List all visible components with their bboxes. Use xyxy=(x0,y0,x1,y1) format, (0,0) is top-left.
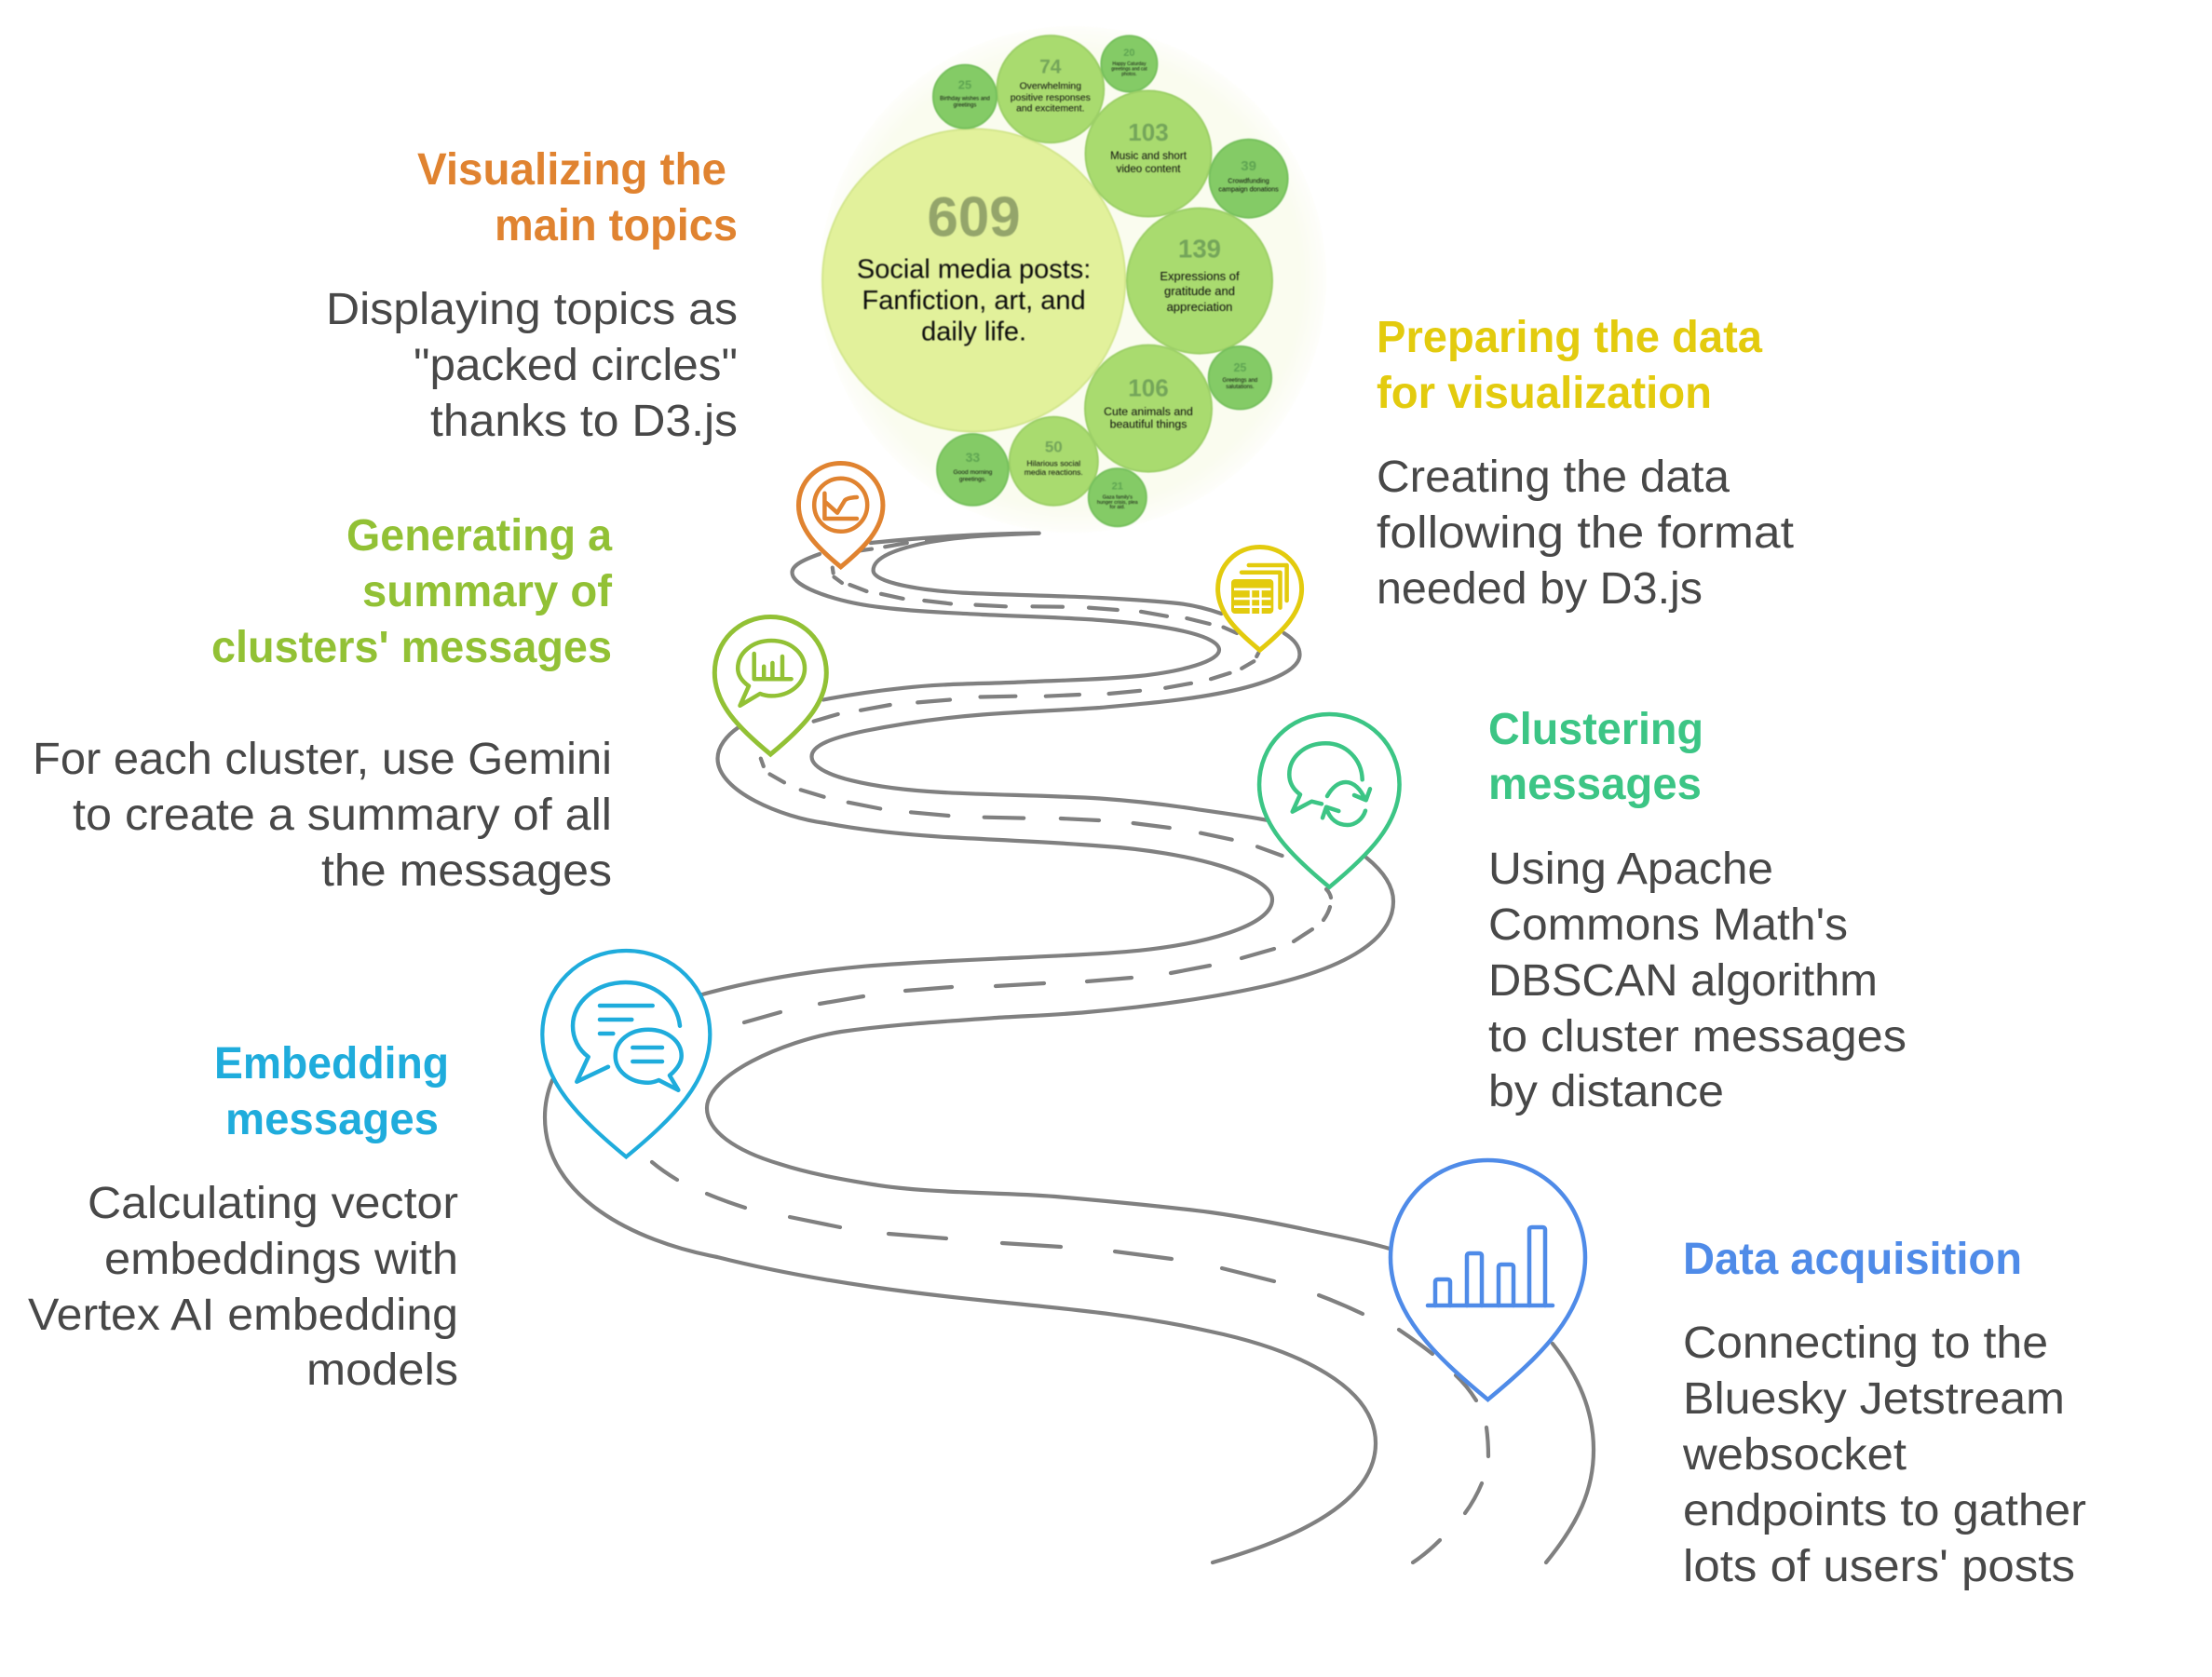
heading xyxy=(1377,313,1762,418)
bubble: 21 gaza family: for aid. xyxy=(1110,505,1125,510)
body xyxy=(1377,453,1794,614)
winding road xyxy=(545,534,1594,1562)
bubble: 74 overwhelming positive responses xyxy=(997,35,1104,142)
bubble: 609 social media posts: Social media posts: xyxy=(857,255,1091,285)
icon: speech bubble with bars xyxy=(738,641,805,706)
body: Connecting to the xyxy=(1683,1319,2048,1368)
icon: bar chart xyxy=(1428,1227,1553,1305)
bubble: 20 happy caturday xyxy=(1101,35,1157,91)
body: For each cluster, use Gemini xyxy=(33,735,612,784)
bubble: 609 social media posts: Fanfiction, art, and xyxy=(862,286,1086,316)
bubble: 106 cute animals: Cute animals and xyxy=(1104,405,1193,418)
bubble: 33 good morning xyxy=(937,434,1009,506)
bubble: 74 overwhelming positive responses: and excitement. xyxy=(1016,103,1084,114)
bubble: 74 overwhelming positive responses: 74 xyxy=(1039,56,1062,78)
icon: line chart in circle xyxy=(814,479,867,532)
bubble: 50 hilarious reactions: 50 xyxy=(1045,438,1063,455)
body: models xyxy=(306,1346,458,1395)
body xyxy=(28,1179,458,1395)
heading: summary of xyxy=(362,567,613,616)
body: endpoints to gather xyxy=(1683,1486,2086,1535)
heading: Generating a xyxy=(346,511,612,561)
body: needed by D3.js xyxy=(1377,564,1703,614)
heading xyxy=(214,1039,449,1144)
icon: stacked tables xyxy=(1231,565,1287,614)
text block: visualizing the main topics xyxy=(326,145,738,446)
heading: for visualization xyxy=(1377,369,1712,418)
body xyxy=(326,285,738,446)
bubble: 74 overwhelming positive responses: positive responses xyxy=(1011,93,1091,103)
body: Vertex AI embedding xyxy=(28,1291,458,1340)
bubble: 74 overwhelming positive responses: Overwhelming xyxy=(1020,82,1081,92)
bubble: 103 music and short video: 103 xyxy=(1128,118,1169,146)
heading: Data acquisition xyxy=(1683,1235,2022,1284)
body: lots of users' posts xyxy=(1683,1542,2075,1591)
body: DBSCAN algorithm xyxy=(1488,956,1878,1006)
text block: data acquisition xyxy=(1682,1235,2086,1591)
bubble: 103 music and short video xyxy=(1086,91,1211,216)
heading: Clustering xyxy=(1488,705,1703,754)
body: embeddings with xyxy=(104,1235,458,1284)
body xyxy=(33,735,612,896)
bubble: 103 music and short video: video content xyxy=(1117,163,1181,175)
body: to create a summary of all xyxy=(73,791,612,840)
heading: Preparing the data xyxy=(1377,313,1762,362)
body: Creating the data xyxy=(1377,453,1730,502)
body: Calculating vector xyxy=(88,1179,458,1228)
heading: main topics xyxy=(495,201,738,250)
bubble: 106 cute animals: beautiful things xyxy=(1110,418,1187,431)
heading xyxy=(417,145,738,250)
body: websocket xyxy=(1682,1430,1907,1480)
heading: messages xyxy=(225,1095,439,1144)
bubble: 25 birthday wishes: 25 xyxy=(958,78,971,92)
bubble: 609 social media posts: 609 xyxy=(928,186,1021,248)
bubble: 39 crowdfunding: campaign donations xyxy=(1218,184,1279,194)
body: Commons Math's xyxy=(1488,900,1848,950)
body: to cluster messages xyxy=(1488,1012,1907,1062)
bubble: 20 happy caturday: Happy Caturday xyxy=(1112,61,1147,67)
bubble: 21 gaza family: 21 xyxy=(1112,480,1123,492)
bubble: 33 good morning: Good morning xyxy=(954,469,993,476)
bubble: 25 birthday wishes xyxy=(933,65,997,128)
text block: embedding messages xyxy=(28,1039,458,1395)
bubble: 25 greetings: salutations. xyxy=(1226,385,1255,390)
bubble: 139 gratitude xyxy=(1127,209,1272,354)
heading: Embedding xyxy=(214,1039,449,1089)
marker: data acquisition (blue) xyxy=(1391,1160,1585,1400)
body: Using Apache xyxy=(1488,845,1773,894)
bubble: 103 music and short video: Music and short xyxy=(1110,150,1187,162)
bubble: 25 greetings: Greetings and xyxy=(1223,378,1257,384)
marker: embedding (cyan) xyxy=(542,951,710,1156)
marker: clustering (teal) xyxy=(1259,714,1400,887)
road edges xyxy=(545,534,1594,1562)
heading: messages xyxy=(1488,760,1702,809)
bubble: 21 gaza family xyxy=(1089,468,1147,526)
bubble: 139 gratitude: 139 xyxy=(1178,234,1221,263)
bubble: 20 happy caturday: photos. xyxy=(1121,72,1137,77)
text block: clustering messages xyxy=(1488,705,1907,1116)
body: thanks to D3.js xyxy=(430,397,738,446)
body: "packed circles" xyxy=(414,341,738,390)
bubble: 20 happy caturday: 20 xyxy=(1123,47,1135,59)
body xyxy=(1488,845,1907,1116)
bubble: 25 greetings xyxy=(1209,346,1271,409)
bubble: 33 good morning: greetings. xyxy=(959,477,986,483)
bubble: 106 cute animals xyxy=(1085,345,1212,472)
bubble: 50 hilarious reactions xyxy=(1010,417,1098,506)
bubble: 21 gaza family: Gaza family's xyxy=(1103,494,1133,500)
bubble: 39 crowdfunding: Crowdfunding xyxy=(1228,177,1269,185)
packed circles chart xyxy=(820,26,1326,533)
bubble: 25 greetings: 25 xyxy=(1233,361,1246,374)
marker: summary (lime green) xyxy=(714,616,826,754)
bubble: 139 gratitude: gratitude and xyxy=(1164,284,1235,298)
body xyxy=(1682,1319,2086,1591)
marker: preparing data (yellow) xyxy=(1218,548,1302,650)
marker: visualizing (orange) xyxy=(798,464,883,567)
body: Bluesky Jetstream xyxy=(1683,1374,2065,1424)
outer halo circle xyxy=(820,26,1326,533)
heading xyxy=(1488,705,1703,809)
bubble: 139 gratitude: Expressions of xyxy=(1160,269,1240,283)
road centre dashes xyxy=(652,536,1488,1562)
text block: generating a summary xyxy=(33,511,613,896)
heading xyxy=(211,511,613,672)
bubble: 25 birthday wishes: greetings xyxy=(954,102,976,108)
bubble: 609 social media posts xyxy=(822,128,1125,432)
bubble: 106 cute animals: 106 xyxy=(1128,374,1169,402)
bubble: 21 gaza family: hunger crisis, plea xyxy=(1097,500,1138,506)
bubble: 33 good morning: 33 xyxy=(966,450,980,465)
icon: two speech bubbles xyxy=(573,982,682,1090)
bubble: 25 birthday wishes: Birthday wishes and xyxy=(940,97,990,102)
bubble: 50 hilarious reactions: Hilarious social xyxy=(1026,459,1080,468)
bubble: 50 hilarious reactions: media reactions. xyxy=(1025,467,1083,477)
icon: bubble with cycle arrows xyxy=(1289,743,1370,825)
body: by distance xyxy=(1488,1067,1724,1116)
body: following the format xyxy=(1377,508,1794,558)
heading: Visualizing the xyxy=(417,145,726,195)
bubble: 609 social media posts: daily life. xyxy=(921,317,1026,346)
text block: preparing the data xyxy=(1377,313,1794,614)
bubble: 139 gratitude: appreciation xyxy=(1167,300,1232,314)
bubble: 20 happy caturday: greetings and cat xyxy=(1111,66,1147,72)
body: the messages xyxy=(321,846,612,896)
bubble: 39 crowdfunding xyxy=(1210,140,1288,218)
bubble: 39 crowdfunding: 39 xyxy=(1241,158,1256,174)
heading: clusters' messages xyxy=(211,623,612,672)
body: Displaying topics as xyxy=(326,285,738,334)
